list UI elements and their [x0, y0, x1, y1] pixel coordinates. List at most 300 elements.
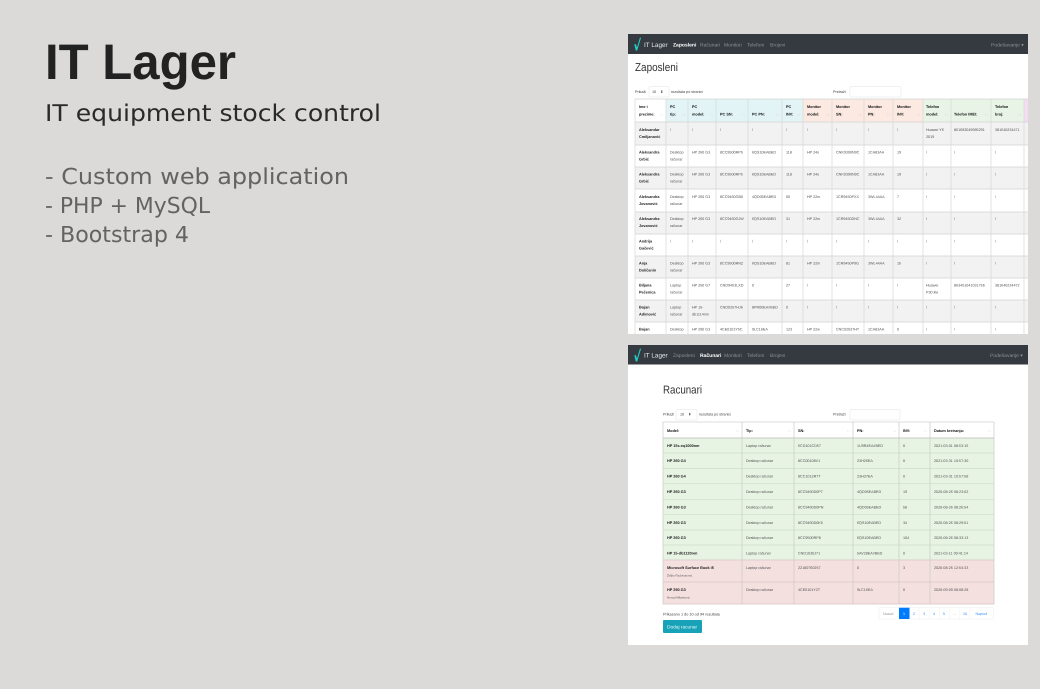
table header: computers	[667, 429, 992, 433]
row: Bojan partial: /	[995, 328, 997, 332]
row: Andrija Gačević: /	[897, 240, 899, 244]
row: Anja Doličanin: 6QS10EABED	[752, 262, 776, 266]
table header: computers: SN:	[798, 429, 805, 433]
row: HP 260 G4 second: 23H37EA	[857, 474, 873, 478]
table header: computers: ↑↓	[788, 429, 792, 433]
feature list: - Bootstrap 4	[45, 223, 189, 248]
navigation bar: employees: Zaposleni	[673, 42, 697, 48]
row: Aleksandar Cmiljanović: /	[670, 128, 672, 132]
row: Anja Doličanin: 15	[897, 262, 901, 266]
table controls: computers: rezultata po stranici	[699, 412, 731, 416]
table controls: employees: Pretraži	[833, 90, 846, 94]
table header: computers: Model:	[667, 429, 679, 433]
row: Aleksandra Jovanović second: HP 260 G3	[692, 217, 710, 221]
row: Aleksandra Grbić: /	[995, 150, 997, 154]
row: Biljana Pečenica: HP 250 G7	[692, 284, 710, 288]
pagination: 10	[963, 612, 967, 616]
table header: employees: Monitor	[868, 105, 882, 109]
row: Biljana Pečenica: Biljana	[639, 284, 652, 288]
row: Andrija Gačević: /	[926, 240, 928, 244]
row: Aleksandra Jovanović: HP 22m	[807, 195, 820, 199]
row: Anja Doličanin: Doličanin	[639, 268, 657, 272]
table header: computers: ↑↓	[924, 429, 928, 433]
row: Anja Doličanin: Desktop	[670, 262, 684, 266]
row: HP 15s-eq1000nm: 1U9R4EA#BED	[857, 444, 883, 448]
row: Anja Doličanin: 8CC9500RNZ	[720, 262, 744, 266]
row: Aleksandra Grbić duplicate: HP 260 G3	[692, 172, 710, 176]
row: HP 260 G3 fourth: HP 260 G3	[667, 536, 686, 540]
title: IT Lager	[45, 34, 236, 90]
table header: employees: ↑↓	[682, 112, 686, 116]
row: Biljana Pečenica: /	[807, 284, 809, 288]
pagination: 1	[903, 612, 905, 616]
row: Biljana Pečenica: /	[868, 284, 870, 288]
table header: employees: PC	[692, 105, 698, 109]
row: Aleksandar Cmiljanović: /	[868, 128, 870, 132]
row: Aleksandar Cmiljanović: 381640224471	[995, 128, 1020, 132]
navigation bar: employees: Računari	[700, 42, 720, 48]
row: HP 290 G3: Desktop računar	[746, 588, 774, 592]
row: Andrija Gačević: /	[807, 240, 809, 244]
table header: employees: SN:	[836, 112, 843, 116]
navigation bar: employees: Podešavanje ▾	[991, 42, 1024, 48]
row: Aleksandra Grbić: HP 260 G3	[692, 150, 710, 154]
row: Aleksandra Jovanović second: HP 22m	[807, 217, 820, 221]
pagination: 4	[933, 612, 935, 616]
row: Aleksandra Grbić duplicate: računar	[670, 180, 683, 184]
panel: computers screenshot	[628, 345, 1028, 645]
row: Aleksandra Grbić: Desktop	[670, 150, 684, 154]
navigation bar: computers: Monitori	[724, 353, 742, 359]
navigation bar: employees: Monitori	[724, 42, 742, 48]
row: Biljana Pečenica: /	[836, 284, 838, 288]
row: Aleksandra Jovanović: /	[926, 195, 928, 199]
row: Aleksandra Jovanović second: Jovanović	[639, 224, 658, 228]
row: HP 15s-eq1000nm: 5CD101CD57	[798, 444, 821, 448]
row: HP 260 G3 third: 8CC9460D0K6	[798, 521, 823, 525]
row: Microsoft Surface Book i5: 3	[903, 566, 905, 570]
row: Andrija Gačević: Gačević	[639, 246, 654, 250]
table header: employees: broj:	[995, 112, 1003, 116]
table header: employees: ↑↓	[660, 112, 664, 116]
row: Bojan Adimović: CND0257HJ6	[720, 306, 743, 310]
row: Aleksandra Grbić: 1CA83AA	[868, 150, 885, 154]
row: Aleksandra Grbić duplicate: 8CC9500RP5	[720, 172, 743, 176]
row: Aleksandra Grbić: Grbić	[639, 158, 649, 162]
navigation bar: employees	[628, 34, 1028, 54]
table header: computers: ↑↓	[893, 429, 897, 433]
row: HP 260 G3 third: 2020-08-26 08:29:01	[934, 521, 968, 525]
row: Aleksandra Grbić duplicate: Grbić	[639, 180, 649, 184]
row: Aleksandar Cmiljanović: Cmiljanović	[639, 135, 660, 139]
row: HP 290 G3: 2020-09-09 08:08:28	[934, 588, 968, 592]
row: Bojan partial: Desktop	[670, 328, 684, 332]
table header: employees: Monitor	[807, 105, 821, 109]
table controls: employees: 10 ⬍	[652, 90, 663, 94]
row: Bojan partial: HP 290 G3	[692, 328, 710, 332]
table header: employees: Telefon	[995, 105, 1009, 109]
row: Bojan partial: Bojan	[639, 328, 650, 332]
row: Aleksandar Cmiljanović: /	[807, 128, 809, 132]
row: HP 260 G4 first: 8CC00108V1	[798, 459, 820, 463]
navigation bar: computers	[628, 345, 1028, 364]
table header: employees: PC	[786, 105, 792, 109]
table controls: employees: rezultata po stranici	[671, 90, 703, 94]
table header: employees: PC SN:	[720, 112, 733, 116]
row: Biljana Pečenica: Pečenica	[639, 290, 656, 294]
row: Aleksandra Grbić: 6QS10EABED	[752, 150, 776, 154]
row: Aleksandra Grbić duplicate: 118	[786, 172, 792, 176]
row: Aleksandra Jovanović: računar	[670, 202, 683, 206]
row: HP 15-db1120nm: Laptop računar	[746, 552, 772, 556]
row: Andrija Gačević: /	[720, 240, 722, 244]
computers table	[663, 422, 994, 604]
row: Aleksandra Jovanović: 60	[786, 195, 790, 199]
table header: employees: PC PN:	[752, 112, 765, 116]
row: HP 290 G3: 0	[903, 588, 905, 592]
row: Anja Doličanin: 81	[786, 262, 790, 266]
row: Biljana Pečenica: Huawei	[926, 284, 938, 288]
row: Bojan partial: 9LC16EA	[752, 328, 768, 332]
row: Aleksandra Jovanović second: /	[926, 217, 928, 221]
row: HP 260 G3 first: 2020-08-26 08:23:02	[934, 490, 968, 494]
row: Aleksandra Grbić duplicate: 19	[897, 172, 901, 176]
table header: employees: ↑↓	[858, 112, 862, 116]
table header: employees: ↑↓	[887, 112, 891, 116]
table header: computers: ↑↓	[988, 429, 992, 433]
row: Aleksandra Jovanović second: 1CR9450DNC	[836, 217, 860, 221]
row: HP 260 G3 second	[667, 506, 968, 510]
row: Bojan Adimović: 0	[786, 306, 788, 310]
table header: employees: ↑↓	[945, 112, 949, 116]
row: Bojan Adimović: db1114nm	[692, 312, 709, 316]
row: Anja Doličanin: HP 260 G3	[692, 262, 710, 266]
row: Microsoft Surface Book i5: 2020-08-25 12:54:33	[934, 566, 968, 570]
row: Aleksandra Jovanović second	[639, 217, 997, 228]
row: Aleksandra Jovanović second: /	[954, 217, 956, 221]
row: Bojan partial: 123	[786, 328, 792, 332]
table header: computers: Tip:	[746, 429, 753, 433]
table header: employees: ↑↓	[742, 112, 746, 116]
table header: computers: INV:	[903, 429, 910, 433]
row: Bojan partial	[639, 328, 997, 332]
row: Aleksandra Jovanović: Jovanović	[639, 202, 658, 206]
row: Andrija Gačević: /	[836, 240, 838, 244]
row: Bojan partial: 4CE0101Y5C	[720, 328, 743, 332]
row: Aleksandra Grbić: 118	[786, 150, 792, 154]
row: Aleksandra Jovanović: 8CC9460GB0	[720, 195, 743, 199]
row: HP 260 G3 third	[667, 521, 968, 525]
navigation bar: computers: Zaposleni	[673, 353, 695, 359]
row: Aleksandra Grbić: Aleksandra	[639, 150, 660, 154]
row: Bojan Adimović: računar	[670, 312, 683, 316]
button: Dodaj racunar	[663, 620, 702, 633]
employees table	[635, 99, 1028, 334]
table controls: computers: Pretraži	[833, 412, 846, 416]
row: Anja Doličanin: /	[954, 262, 956, 266]
heading: Zaposleni: Zaposleni	[635, 62, 678, 74]
row: Bojan Adimović: Laptop	[670, 306, 681, 310]
row: HP 260 G3 third: Desktop računar	[746, 521, 774, 525]
pagination: 3	[923, 612, 925, 616]
row: Aleksandra Grbić	[639, 150, 997, 162]
panel: employees screenshot	[628, 34, 1028, 334]
navigation bar: computers: Podešavanje ▾	[990, 353, 1023, 359]
table header: employees: Telefon	[926, 105, 940, 109]
row: Bojan Adimović: /	[868, 306, 870, 310]
table header: employees: Telefon IMEI:	[954, 112, 977, 116]
row: Aleksandra Grbić duplicate: HP 24o	[807, 172, 819, 176]
row: HP 260 G4 first: HP 260 G4	[667, 459, 687, 463]
row: HP 260 G4 first: 2021-03-31 10:57:30	[934, 459, 968, 463]
table controls: computers: Prikaži	[663, 412, 674, 416]
table header: computers: Datum kreiranja:	[934, 429, 964, 433]
row: HP 260 G3 second: 2020-08-26 08:26:54	[934, 506, 968, 510]
row: Aleksandar Cmiljanović: /	[720, 128, 722, 132]
row: Aleksandar Cmiljanović: /	[897, 128, 899, 132]
row: HP 260 G3 fourth	[667, 536, 968, 540]
row: Bojan Adimović: /	[926, 306, 928, 310]
row: Biljana Pečenica: 27	[786, 284, 790, 288]
row: HP 260 G4 first: Desktop računar	[746, 459, 774, 463]
row: Aleksandra Grbić duplicate: /	[995, 172, 997, 176]
navigation bar: computers: Brojevi	[770, 353, 785, 359]
row: HP 260 G3 fourth: 2020-08-26 08:33:13	[934, 536, 968, 540]
row: HP 260 G4 second: Desktop računar	[746, 474, 774, 478]
row: Bojan Adimović: /	[897, 306, 899, 310]
row: HP 260 G3 fourth: 6QS10EABED	[857, 536, 881, 540]
row: Bojan Adimović	[639, 306, 997, 316]
row: Aleksandar Cmiljanović: /	[786, 128, 788, 132]
row: HP 290 G3: HP 290 G3	[667, 588, 686, 592]
row: Aleksandra Grbić: HP 24o	[807, 150, 819, 154]
pagination: ...	[953, 612, 956, 616]
row: Bojan Adimović: /	[995, 306, 997, 310]
row: HP 15s-eq1000nm: HP 15s-eq1000nm	[667, 444, 700, 448]
feature list	[45, 165, 349, 248]
row: Anja Doličanin	[639, 262, 997, 272]
row: Aleksandra Jovanović: 3WL44AA	[868, 195, 885, 199]
row: Aleksandar Cmiljanović: /	[752, 128, 754, 132]
table header: computers: ↑↓	[736, 429, 740, 433]
table controls: computers	[663, 410, 900, 420]
navigation bar: employees: Brojevi	[770, 42, 785, 48]
row: HP 260 G3 third: 34	[903, 521, 907, 525]
row: HP 290 G3: 4CE0101Y2T	[798, 588, 821, 592]
row: HP 260 G3 third: HP 260 G3	[667, 521, 686, 525]
row: Aleksandar Cmiljanović: /	[836, 128, 838, 132]
row: HP 260 G4 second	[667, 474, 968, 478]
row: HP 260 G4 second: 0	[903, 474, 905, 478]
table header: employees: model:	[926, 112, 938, 116]
row: HP 15s-eq1000nm: 0	[903, 444, 905, 448]
row: Aleksandra Jovanović: /	[995, 195, 997, 199]
row: HP 15-db1120nm: CND1030J71	[798, 552, 820, 556]
row: Aleksandra Jovanović second: 32	[897, 217, 901, 221]
row: HP 260 G4 first	[667, 459, 968, 463]
table header: employees: model:	[692, 112, 704, 116]
row: Aleksandra Jovanović second: Aleksandra	[639, 217, 660, 221]
navigation bar: computers: Telefoni	[747, 353, 764, 359]
row: Microsoft Surface Book i5: Microsoft Surface Book i5	[667, 566, 714, 570]
row: Aleksandar Cmiljanović	[639, 128, 1020, 139]
navigation bar: employees: Telefoni	[747, 42, 764, 48]
row: Andrija Gačević: /	[752, 240, 754, 244]
icon: check mark logo	[634, 38, 641, 50]
navigation bar: computers: IT Lager	[644, 352, 669, 360]
table header: computers: ↑↓	[847, 429, 851, 433]
row: Andrija Gačević: Andrija	[639, 240, 653, 244]
table controls: employees: Prikaži	[635, 90, 646, 94]
table header: employees: ↑↓	[797, 112, 801, 116]
row: Bojan partial: CNC02037HT	[836, 328, 860, 332]
row: HP 260 G4 first: 0	[903, 459, 905, 463]
table controls: computers: 10 ⬍	[680, 412, 691, 416]
row: Aleksandra Jovanović second: 31	[786, 217, 790, 221]
row: Andrija Gačević: /	[868, 240, 870, 244]
row: Anja Doličanin: računar	[670, 268, 683, 272]
row: Aleksandra Jovanović: 1CR9450PXX	[836, 195, 859, 199]
table header: employees: Monitor	[897, 105, 911, 109]
feature list: - Custom web application	[45, 165, 349, 190]
table header: computers: PN:	[857, 429, 864, 433]
row: Anja Doličanin: 3WL44AA	[868, 262, 885, 266]
table header: employees	[639, 105, 1022, 116]
row: Aleksandra Jovanović: Aleksandra	[639, 195, 660, 199]
row: HP 260 G4 second: 8CC1012R7T	[798, 474, 821, 478]
row: Aleksandar Cmiljanović: 861683049685291	[954, 128, 985, 132]
row: Anja Doličanin: /	[926, 262, 928, 266]
row: HP 260 G3 first: 19	[903, 490, 907, 494]
row: HP 260 G3 first: 4QD05EABED	[857, 490, 882, 494]
pagination	[879, 608, 994, 619]
row: HP 260 G3 first	[667, 490, 968, 494]
row: Aleksandra Jovanović second: 8CC9460GJW	[720, 217, 744, 221]
row: Biljana Pečenica	[639, 284, 1020, 294]
table header: employees: ↑↓	[776, 112, 780, 116]
table header: employees: ↑↓	[1018, 112, 1022, 116]
row: Microsoft Surface Book i5: 0	[857, 566, 859, 570]
row: HP 260 G3 first: 8CC9460D0P7	[798, 490, 823, 494]
row: Biljana Pečenica: /	[897, 284, 899, 288]
row: Microsoft Surface Book i5: Laptop računar	[746, 566, 772, 570]
row: Bojan partial: /	[926, 328, 928, 332]
row: HP 260 G3 fourth: 104	[903, 536, 909, 540]
table header: employees: ↑↓	[985, 112, 989, 116]
row: Bojan Adimović: HP 15-	[692, 306, 704, 310]
row: Aleksandra Grbić: /	[954, 150, 956, 154]
row: Aleksandra Grbić: računar	[670, 158, 683, 162]
row: Bojan Adimović: Adimović	[639, 312, 656, 316]
row: HP 260 G3 second: 8CC9460D0PN	[798, 506, 824, 510]
row: Aleksandra Jovanović: 4QD05EABED	[752, 195, 777, 199]
row: HP 260 G3 third: 6QS10EABED	[857, 521, 881, 525]
row: HP 260 G4 first: 23H26EA	[857, 459, 873, 463]
row: Aleksandra Jovanović second: /	[995, 217, 997, 221]
row: Aleksandra Jovanović: Desktop	[670, 195, 684, 199]
row: Aleksandra Grbić duplicate: 1CA83AA	[868, 172, 885, 176]
row: Aleksandra Grbić duplicate	[639, 172, 997, 184]
row: HP 15-db1120nm	[667, 552, 968, 556]
row: Aleksandra Grbić duplicate: Aleksandra	[639, 172, 660, 176]
table header: employees: INV:	[786, 112, 793, 116]
row: Biljana Pečenica: CND9453LXD	[720, 284, 744, 288]
row: Aleksandra Grbić: 19	[897, 150, 901, 154]
row: Aleksandra Grbić duplicate: 6QS10EABED	[752, 172, 776, 176]
row: Bojan Adimović: 8PR00EA#BED	[752, 306, 778, 310]
row: Aleksandra Grbić duplicate: Desktop	[670, 172, 684, 176]
table header: employees: model:	[807, 112, 819, 116]
row: Biljana Pečenica: Laptop	[670, 284, 681, 288]
table header: employees: ↑↓	[710, 112, 714, 116]
table header: employees: INV:	[897, 112, 904, 116]
row: Aleksandar Cmiljanović: Huawei Y6	[926, 128, 944, 132]
pagination: 5	[943, 612, 945, 616]
row: Microsoft Surface Book i5: 22180760257	[798, 566, 821, 570]
pagination: Nazad	[883, 612, 893, 616]
row: HP 260 G3 fourth: Desktop računar	[746, 536, 774, 540]
feature list: - PHP + MySQL	[45, 194, 211, 219]
results summary: Prikazano 1 do 10 od 94 rezultata	[663, 612, 721, 616]
row: Bojan Adimović: /	[836, 306, 838, 310]
row: Aleksandra Grbić duplicate: /	[926, 172, 928, 176]
row: HP 290 G3: Nenad Milanković	[667, 596, 690, 600]
row: Aleksandra Grbić duplicate: CNK9390N9C	[836, 172, 860, 176]
row: HP 260 G4 second: HP 260 G4	[667, 474, 687, 478]
table header: employees: prezime:	[639, 112, 655, 116]
row: HP 260 G3 first: HP 260 G3	[667, 490, 686, 494]
row: Bojan partial: /	[954, 328, 956, 332]
row: Aleksandra Jovanović: 7	[897, 195, 899, 199]
row: HP 260 G3 second: 58	[903, 506, 907, 510]
row: Bojan Adimović: Bojan	[639, 306, 650, 310]
row: HP 260 G3 second: 4QD05EABED	[857, 506, 882, 510]
pagination: 2	[913, 612, 915, 616]
row: Aleksandar Cmiljanović: 2019	[926, 135, 934, 139]
button: Dodaj racunar: Dodaj racunar	[667, 624, 698, 630]
row: HP 260 G3 fourth: 8CC9500RP8	[798, 536, 821, 540]
row: Aleksandra Jovanović second: 6QS10EABED	[752, 217, 776, 221]
heading: Racunari: Racunari	[663, 384, 702, 396]
row: HP 15-db1120nm: 0	[903, 552, 905, 556]
row: HP 290 G3	[667, 588, 968, 600]
row: Aleksandra Jovanović: HP 260 G3	[692, 195, 710, 199]
row: Aleksandra Jovanović	[639, 195, 997, 206]
row: HP 260 G3 second: Desktop računar	[746, 506, 774, 510]
row: HP 15-db1120nm: 5AV28EA#BED	[857, 552, 883, 556]
row: HP 260 G3 second: HP 260 G3	[667, 506, 686, 510]
row: HP 260 G3 first: Desktop računar	[746, 490, 774, 494]
row: Biljana Pečenica: 863451041031756	[954, 284, 985, 288]
table header: employees: PC	[670, 105, 676, 109]
icon: check mark logo	[634, 348, 641, 362]
row: Anja Doličanin: Anja	[639, 262, 648, 266]
row: Aleksandar Cmiljanović: Aleksandar	[639, 128, 660, 132]
row: Biljana Pečenica: 381640224472	[995, 284, 1020, 288]
row: Andrija Gačević	[639, 240, 997, 250]
table header: employees: PN:	[868, 112, 875, 116]
row: Aleksandra Grbić duplicate: /	[954, 172, 956, 176]
row: Aleksandar Cmiljanović: /	[692, 128, 694, 132]
table header: employees: tip:	[670, 112, 676, 116]
row: Biljana Pečenica: 0	[752, 284, 754, 288]
row: Anja Doličanin: HP 22m	[807, 262, 820, 266]
row: Bojan partial: HP 22w	[807, 328, 820, 332]
row: HP 15s-eq1000nm: 2021-03-01 08:53:16	[934, 444, 968, 448]
row: Andrija Gačević: /	[995, 240, 997, 244]
row: Andrija Gačević: /	[954, 240, 956, 244]
row: Bojan Adimović: /	[954, 306, 956, 310]
